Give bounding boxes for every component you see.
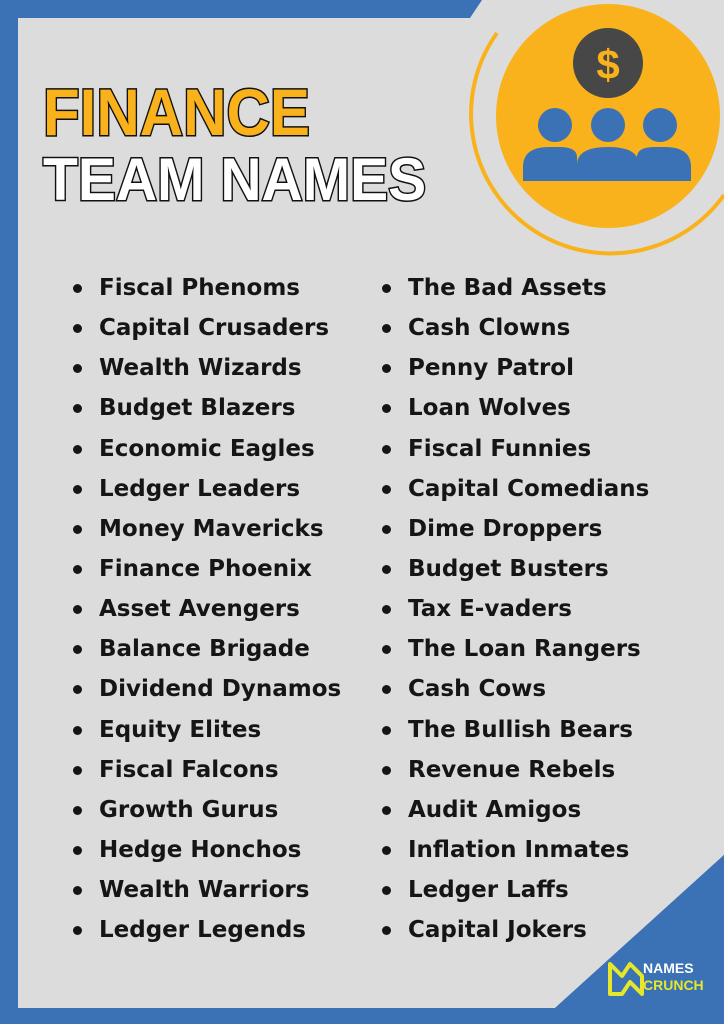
title: FINANCE <box>43 75 310 149</box>
list: right column: Cash Clowns <box>408 315 570 341</box>
list: right column: The Bullish Bears <box>408 717 633 743</box>
list: right column: The Loan Rangers <box>408 636 641 662</box>
list: left column: Budget Blazers <box>99 395 295 421</box>
list: left column: Finance Phoenix <box>99 556 312 582</box>
list: right column: Dime Droppers <box>408 516 602 542</box>
list: left column: Money Mavericks <box>99 516 324 542</box>
list: left column: Dividend Dynamos <box>99 676 341 702</box>
list: right column: Budget Busters <box>408 556 609 582</box>
list: left column: Balance Brigade <box>99 636 310 662</box>
list: left column: Wealth Warriors <box>99 877 309 903</box>
list: right column: Fiscal Funnies <box>408 436 591 462</box>
title <box>42 75 426 213</box>
list: left column: Economic Eagles <box>99 436 315 462</box>
list: left column: Ledger Legends <box>99 917 306 943</box>
list: right column: Cash Cows <box>408 676 546 702</box>
list: right column: Capital Jokers <box>408 917 587 943</box>
logo <box>608 960 704 996</box>
list: right column: The Bad Assets <box>408 275 607 301</box>
list: right column: Penny Patrol <box>408 355 574 381</box>
list: right column: Inflation Inmates <box>408 837 629 863</box>
list: right column: Audit Amigos <box>408 797 581 823</box>
list: left column: Capital Crusaders <box>99 315 329 341</box>
title: TEAM NAMES <box>43 146 426 213</box>
list: left column: Asset Avengers <box>99 596 300 622</box>
list: left column: Fiscal Phenoms <box>99 275 300 301</box>
icon: team with dollar <box>469 4 724 256</box>
list: right column <box>382 275 649 943</box>
list: left column: Wealth Wizards <box>99 355 302 381</box>
logo: CRUNCH <box>643 977 704 993</box>
list: left column: Ledger Leaders <box>99 476 300 502</box>
list: right column: Tax E-vaders <box>408 596 572 622</box>
list: right column: Ledger Laffs <box>408 877 569 903</box>
list: left column: Growth Gurus <box>99 797 278 823</box>
list: left column: Equity Elites <box>99 717 261 743</box>
list: left column: Hedge Honchos <box>99 837 301 863</box>
list: right column: Loan Wolves <box>408 395 571 421</box>
icon: team with dollar: $ <box>596 41 620 88</box>
logo: NAMES <box>643 960 694 976</box>
list: right column: Capital Comedians <box>408 476 649 502</box>
list: right column: Revenue Rebels <box>408 757 615 783</box>
list: left column <box>73 275 341 943</box>
list: left column: Fiscal Falcons <box>99 757 279 783</box>
